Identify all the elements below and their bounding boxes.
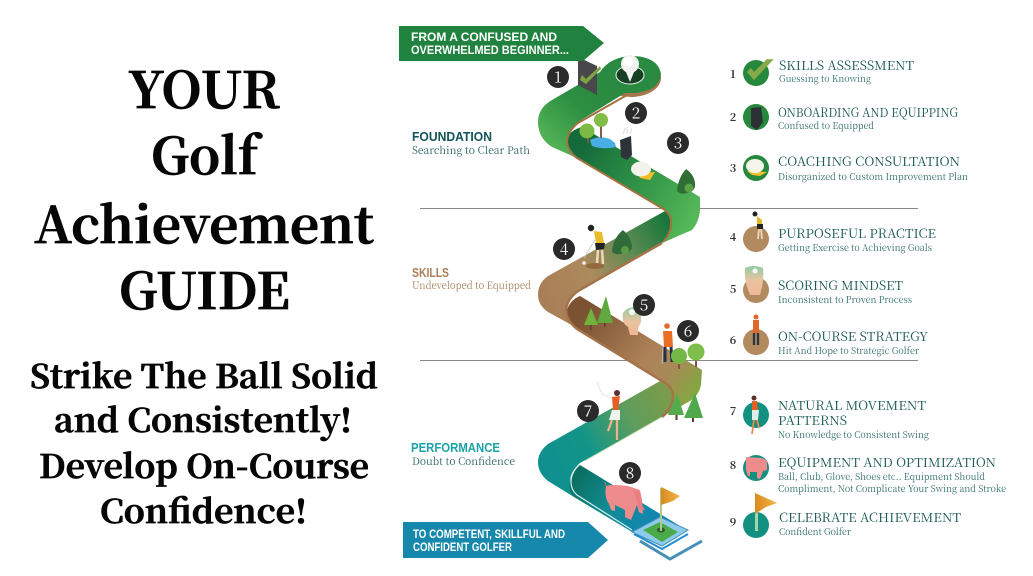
title: Your Golf Achievement Guide: GUIDE [119,252,290,324]
title: Your Golf Achievement Guide: Achievement [34,186,374,258]
list item 5: scoring mindset [730,266,912,306]
section label: performance: Doubt to Confidence [412,454,515,469]
list item 4: purposeful practice: PURPOSEFUL PRACTICE [778,223,936,242]
top section: foundation green road with tee [538,56,700,243]
list item 5: scoring mindset: SCORING MINDSET [778,275,904,294]
list item 1: skills assessment: 1 [730,66,736,82]
section label: foundation [412,130,530,158]
middle section: skills brown road [538,211,702,417]
icon: pine trees [584,296,613,330]
list item 7: natural movement patterns [730,395,930,441]
section label: foundation: Searching to Clear Path [412,143,530,158]
subtitle: promise text [30,352,378,533]
icon: tee and golf ball hole [616,55,644,84]
banner: to competent golfer: CONFIDENT GOLFER [413,540,512,554]
list item 3: coaching consultation [730,151,969,183]
banner: from a confused beginner [399,26,604,61]
list item 9: celebrate achievement: 9 [730,514,736,530]
list item 8: equipment and optimization: EQUIPMENT AND OPTIMIZATION [778,452,996,471]
list item 8: equipment and optimization: Compliment, Not Complicate Your Swing and Stroke [778,481,1006,495]
banner: from a confused beginner: FROM A CONFUSED AND [411,30,557,44]
icon: head with ball [623,307,641,335]
list item 9: celebrate achievement: CELEBRATE ACHIEVEMENT [779,507,962,526]
number badges on the path: 7 [584,400,592,422]
list item 4: purposeful practice: Getting Exercise to Achieving Goals [778,240,932,254]
banner: from a confused beginner: OVERWHELMED BEGINNER... [411,43,569,57]
subtitle: promise text: and Consistently! [54,396,352,442]
list item 7: natural movement patterns: No Knowledge to Consistent Swing [778,427,930,441]
list item 7: natural movement patterns: 7 [730,403,736,419]
list item 1: skills assessment: SKILLS ASSESSMENT [779,55,915,74]
section label: performance [411,441,515,469]
icon: tree cluster on skills road [612,230,632,254]
list item 8: equipment and optimization: 8 [730,457,736,473]
title: Your Golf Achievement Guide: Golf [151,117,263,189]
section label: performance: PERFORMANCE [411,441,500,455]
list item 2: onboarding and equipping: Confused to Equipped [778,118,874,132]
list item 6: on-course strategy [730,314,928,357]
icon: trees and pond [580,113,616,148]
icon: hole and flag [632,487,702,559]
icon: golfer 4 [582,225,605,269]
banner: to competent golfer: TO COMPETENT, SKILLFUL AND [413,527,565,541]
winding course path [538,56,702,532]
section label: skills: Undeveloped to Equipped [412,278,531,293]
title: Your Golf Achievement Guide [34,51,374,324]
icon: golf bag [620,127,632,160]
icon: golfer 7 [597,382,620,440]
list item 1: skills assessment: Guessing to Knowing [779,71,872,85]
number badges on the path: 2 [632,102,640,124]
bottom section: performance teal road [538,380,680,532]
icon: round trees [671,344,704,369]
list item 7: natural movement patterns: PATTERNS [778,410,847,429]
icon: tree cluster [677,169,695,194]
list item 8: equipment and optimization: Ball, Club, Glove, Shoes etc.. Equipment Should [778,469,985,483]
title: Your Golf Achievement Guide: YOUR [128,51,280,123]
list item 2: onboarding and equipping: ONBOARDING AND EQUIPPING [778,102,959,121]
list item 6: on-course strategy: ON-COURSE STRATEGY [778,326,928,345]
list item 6: on-course strategy: 6 [730,332,737,348]
list item 8: equipment and optimization [730,452,1006,495]
list item 4: purposeful practice: 4 [730,229,737,245]
list item 3: coaching consultation: COACHING CONSULTATION [778,151,960,170]
section label: skills [412,266,531,293]
icon: pink elephant [605,482,645,520]
list item 9: celebrate achievement: Confident Golfer [779,524,852,538]
number badges on the path: 1 [554,66,562,88]
list item 2: onboarding and equipping [730,102,959,132]
list item 3: coaching consultation: Disorganized to Custom Improvement Plan [778,169,969,183]
list item 2: onboarding and equipping: 2 [730,109,736,125]
number badges on the path: 3 [674,132,682,154]
number badges on the path: 4 [560,238,569,260]
list item 7: natural movement patterns: NATURAL MOVEMENT [778,395,927,414]
icon: pine trees right [668,393,703,422]
number badges on the path [547,66,699,484]
icon: cap and pad [631,162,655,180]
icon: golfer 6 [662,323,673,364]
icon: door with checkmark [578,57,601,95]
number badges on the path: 8 [626,462,634,484]
list item 6: on-course strategy: Hit And Hope to Strategic Golfer [778,343,920,357]
subtitle: promise text: Strike The Ball Solid [30,352,378,398]
banner: to competent golfer [403,522,608,558]
list item 9: celebrate achievement [730,493,962,538]
section label: skills: SKILLS [412,266,449,280]
list item 1: skills assessment [730,55,915,86]
subtitle: promise text: Develop On-Course [39,442,369,488]
subtitle: promise text: Confidence! [100,487,307,533]
list item 3: coaching consultation: 3 [730,160,736,176]
list item 4: purposeful practice [730,212,936,254]
list item 5: scoring mindset: Inconsistent to Proven Process [778,292,912,306]
list item 5: scoring mindset: 5 [730,281,737,297]
number badges on the path: 6 [684,320,692,342]
number badges on the path: 5 [640,294,648,316]
section label: foundation: FOUNDATION [412,130,492,144]
